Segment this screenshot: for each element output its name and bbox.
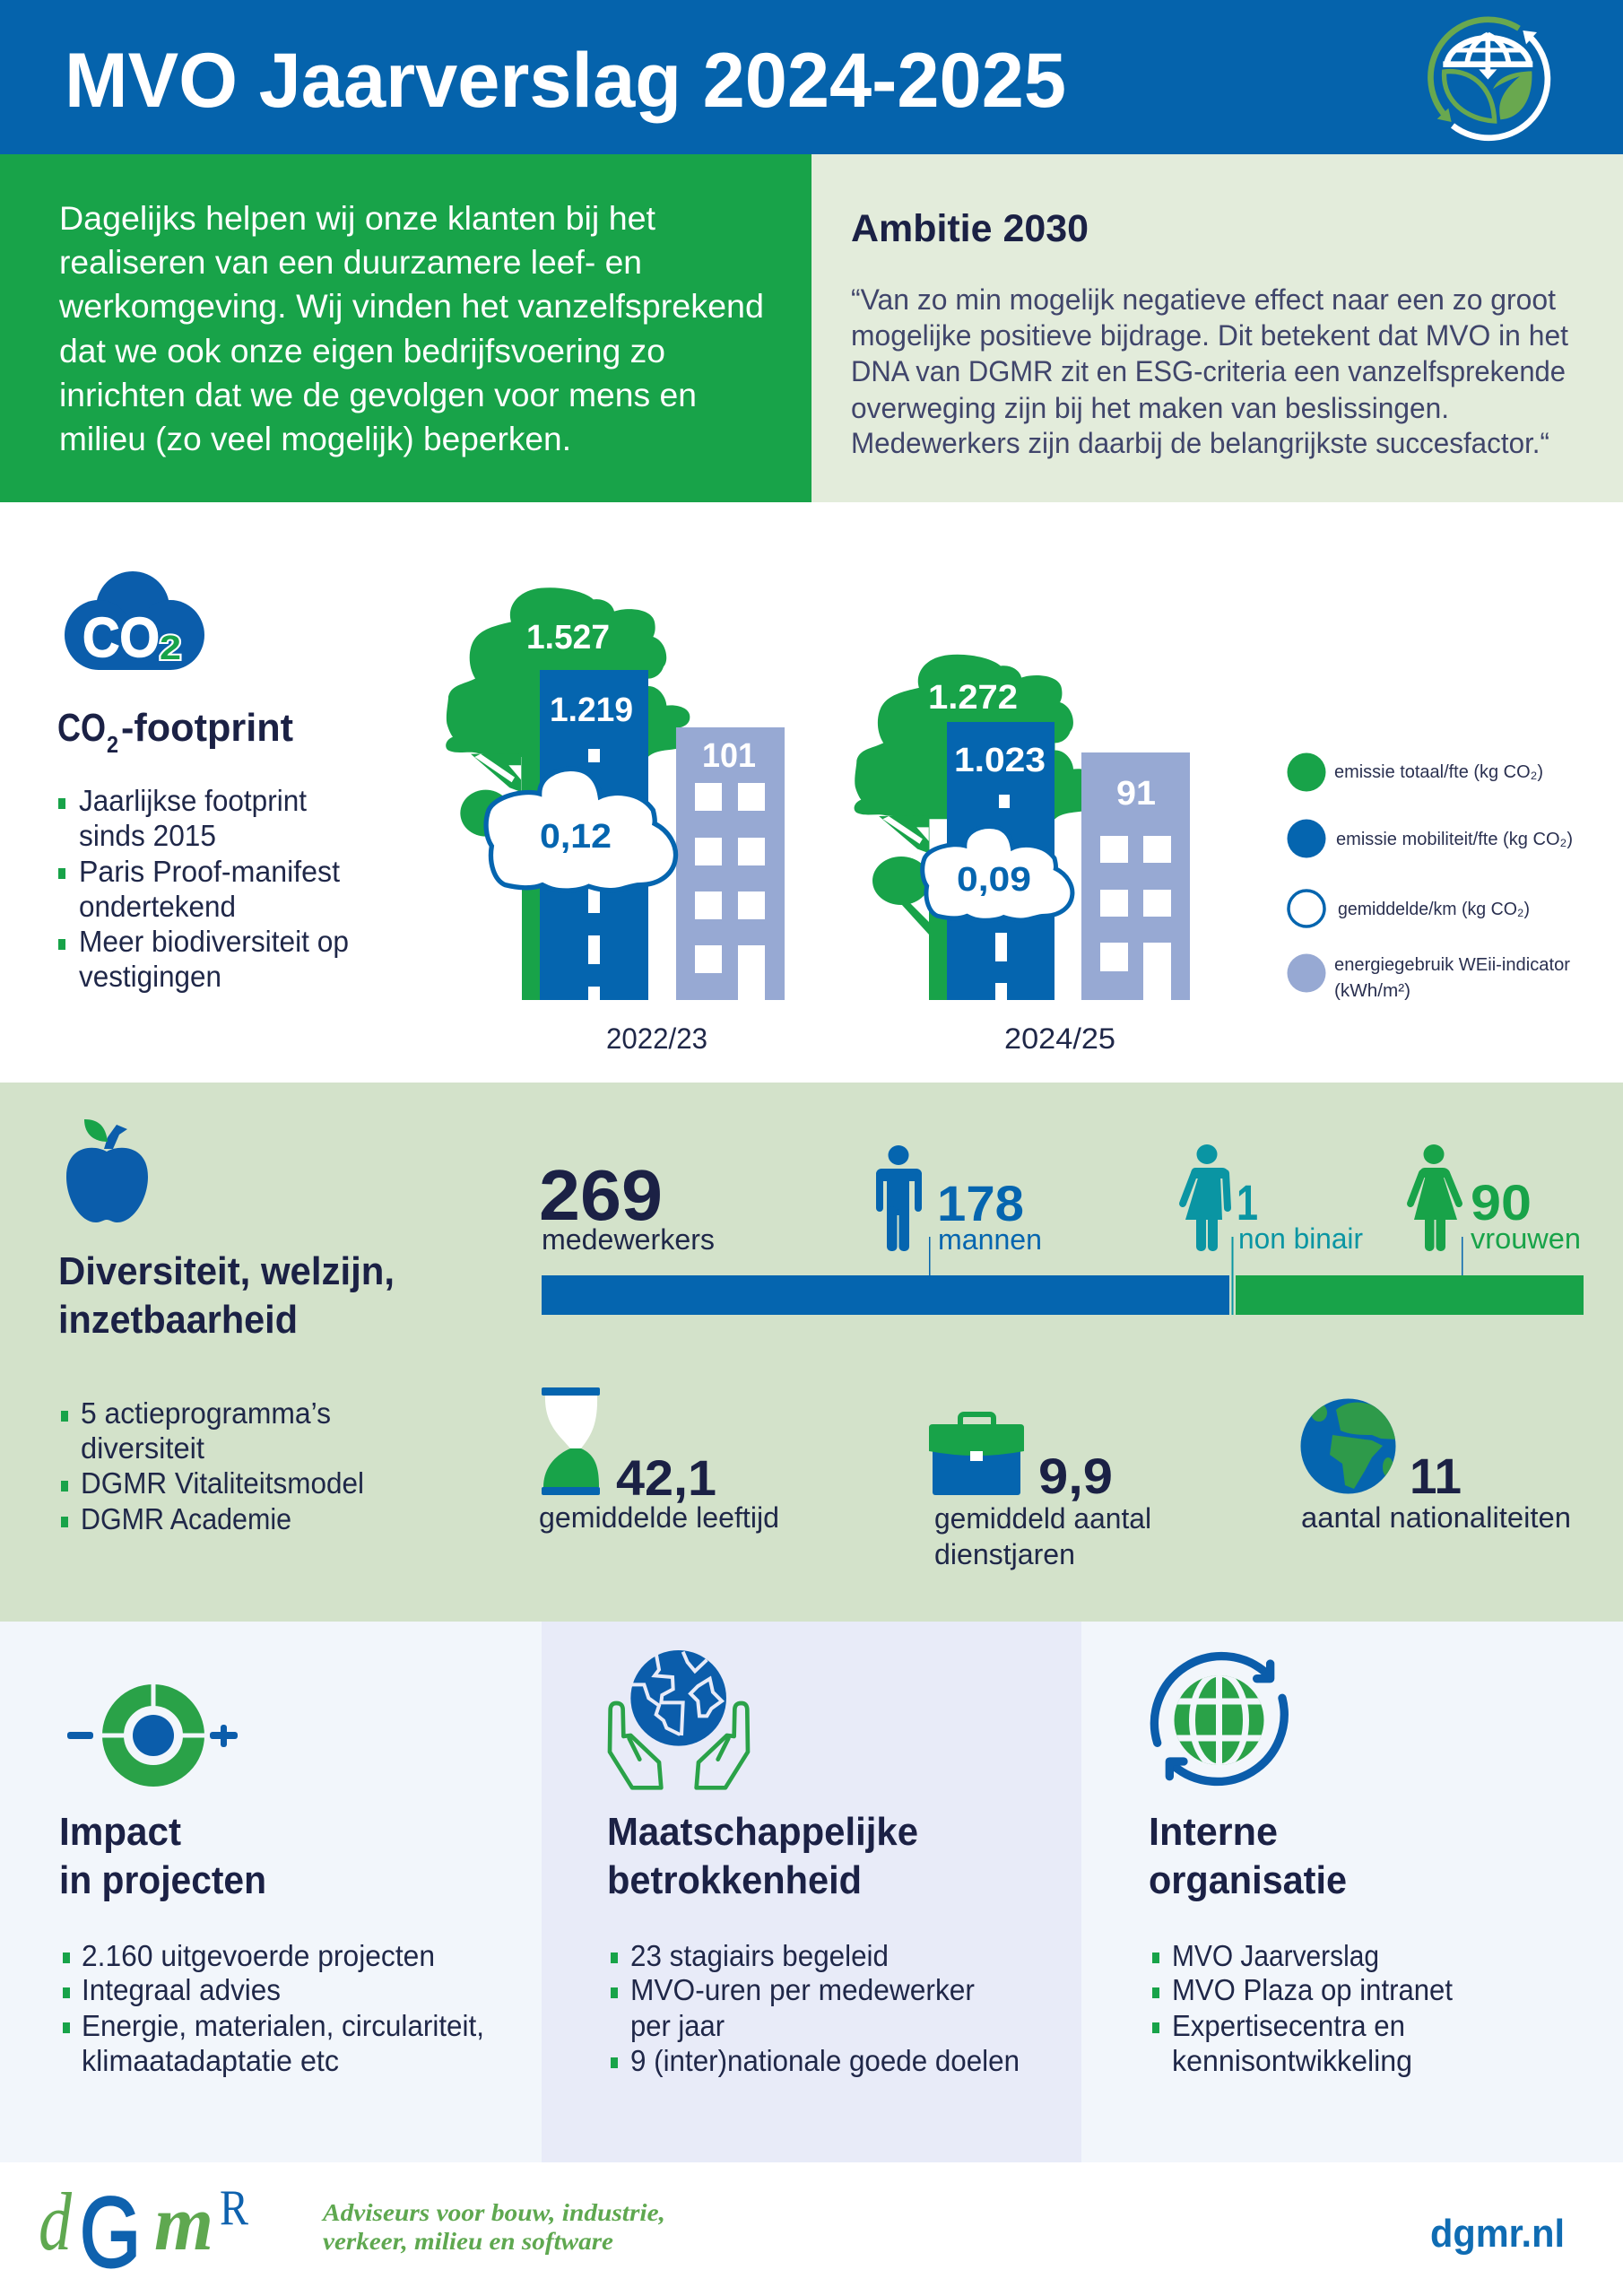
quote text: DNA van DGMR zit en ESG-criteria een vanzelfsprekende [851,355,1566,387]
stat: 90 vrouwen: vrouwen [1471,1222,1581,1255]
building: energiegebruik 101: 101 [702,737,756,775]
heading: interne organisatie: Interne [1149,1810,1278,1854]
panel: diversiteit [0,1083,1623,1622]
icon: impact target [67,1683,238,1776]
axis label: 2024/25: 2024/25 [1004,1022,1115,1055]
stat: 9,9 dienstjaren: 9,9 [1038,1448,1113,1504]
bullet list: diversiteit: DGMR Academie [81,1502,291,1535]
icon: CO2 cloud: 2 [160,630,181,667]
panel: CO2-footprint [57,571,1573,1055]
bullet list: diversiteit: diversiteit [81,1431,204,1465]
bullet list: maatschappelijke: 23 stagiairs begeleid [630,1939,889,1972]
bullet list: CO2 [58,784,349,993]
panel: introduction: milieu (zo veel mogelijk) beperken. [59,421,571,457]
tree: emissie totaal 1.272: 1.272 [928,679,1018,717]
legend: emissie totaal/fte (kg CO₂) [1334,762,1543,782]
heading: maatschappelijke [607,1810,918,1902]
bullet list: CO2: Meer biodiversiteit op [79,925,349,958]
panel: Ambitie 2030 [812,154,1623,502]
icon: briefcase [929,1414,1024,1495]
icon: non-binary person [1183,1144,1228,1251]
cloud: gemiddelde per km 0,09: 0,09 [957,861,1031,899]
legend: gemiddelde/km (kg CO₂) [1338,900,1530,919]
legend: emissie mobiliteit/fte (kg CO₂) [1336,830,1573,849]
heading: CO2-footprint [57,706,293,758]
icon: earth [1300,1399,1399,1494]
bullet list: interne organisatie: MVO Jaarverslag [1172,1939,1379,1972]
heading: CO2-footprint: CO [57,706,106,750]
panel: introduction: werkomgeving. Wij vinden het vanzelfsprekend [58,288,764,325]
heading: impact: in projecten [59,1858,266,1902]
stat: 90 vrouwen: 90 [1471,1174,1532,1231]
panel: introduction: inrichten dat we de gevolgen voor mens en [59,377,697,413]
bullet list: impact: Integraal advies [82,1973,281,2006]
heading: diversiteit: inzetbaarheid [58,1298,298,1342]
stacked gender bar [542,1237,1584,1315]
panel: introduction: dat we ook onze eigen bedrijfsvoering zo [59,333,665,370]
logo: dGmR [39,2176,249,2288]
stat: 9,9 dienstjaren [934,1448,1151,1570]
stat: 9,9 dienstjaren: gemiddeld aantal [934,1502,1151,1535]
building: energiegebruik 91 [1081,752,1190,1000]
bullet list: maatschappelijke [611,1939,1020,2077]
logo: dGmR: d [39,2176,73,2267]
logo: dGmR: G [80,2178,141,2288]
heading: impact [59,1810,266,1902]
bullet list: maatschappelijke: 9 (inter)nationale goede doelen [630,2044,1020,2077]
stat: 11 nationaliteiten: aantal nationaliteiten [1301,1501,1571,1534]
road: emissie mobiliteit 1.219: 1.219 [550,691,633,729]
stat: 11 nationaliteiten: 11 [1410,1448,1462,1504]
chart: 2024/25 [855,655,1190,1055]
logo: dGmR: R [220,2180,249,2236]
tree: emissie totaal 1.527 [446,587,690,1000]
building: energiegebruik 91: 91 [1116,775,1156,813]
panel: introduction: realiseren van een duurzamere leef- en [59,244,642,281]
heading: diversiteit [58,1249,395,1342]
stat: 269 medewerkers [539,1155,715,1256]
title: MVO Jaarverslag 2024-2025 [65,38,1066,124]
bullet list: CO2: ondertekend [79,890,236,923]
bullet list: impact [63,1939,484,2077]
quote text [851,283,1568,459]
road: emissie mobiliteit 1.023: 1.023 [954,742,1046,779]
stat: 42,1 gemiddelde leeftijd: gemiddelde leeftijd [539,1501,779,1534]
icon: woman [1410,1144,1459,1251]
panel: introduction [0,154,812,502]
tree: emissie totaal 1.527: 1.527 [526,619,610,657]
road: emissie mobiliteit 1.219 [540,670,648,1000]
stat: 1 non binair [1237,1174,1363,1255]
stat: 1 non binair: non binair [1238,1222,1363,1255]
bullet list: CO2: vestigingen [79,960,221,993]
heading: Ambitie 2030: Ambitie 2030 [851,207,1089,250]
axis label: 2022/23: 2022/23 [606,1022,707,1055]
quote text: mogelijke positieve bijdrage. Dit betekent dat MVO in het [851,319,1568,352]
header banner [0,0,1623,154]
building: energiegebruik 101 [676,727,785,1000]
icon: CO2 cloud: CO [82,607,160,669]
icon: globe with leaves logo [1430,20,1548,138]
legend [1288,753,1573,1001]
stat: 269 medewerkers: 269 [539,1155,663,1235]
stat: 178 mannen [937,1175,1042,1256]
heading: CO2-footprint: -footprint [121,706,293,750]
panel: impact in projecten [0,1622,542,2162]
stat: 90 vrouwen [1471,1174,1581,1255]
icon: apple [66,1119,148,1222]
legend: energiegebruik WEii-indicator [1334,955,1570,975]
stat: 42,1 gemiddelde leeftijd: 42,1 [616,1449,716,1506]
heading: CO2-footprint: 2 [107,731,118,758]
bullet list: impact: Energie, materialen, circulariteit, [82,2009,484,2042]
cloud: gemiddelde per km 0,09 [923,827,1072,920]
tagline [321,2199,665,2255]
tagline: verkeer, milieu en software [323,2228,613,2255]
heading: interne organisatie [1149,1810,1347,1902]
bullet list: diversiteit: 5 actieprogramma’s [81,1396,331,1430]
stat: 1 non binair: 1 [1237,1174,1258,1231]
quote text: overweging zijn bij het maken van beslissingen. [851,392,1449,424]
icon: globe in hands [610,1650,748,1787]
road: emissie mobiliteit 1.023 [947,722,1055,1000]
panel: maatschappelijke betrokkenheid [542,1622,1081,2162]
chart: 2022/23 [446,587,785,1055]
website: dgmr.nl [1430,2212,1565,2256]
cloud: gemiddelde per km 0,12: 0,12 [540,818,612,856]
legend: (kWh/m²) [1334,981,1410,1001]
heading: impact: Impact [59,1810,181,1854]
panel: interne organisatie [1081,1622,1623,2162]
heading: diversiteit: Diversiteit, welzijn, [58,1249,395,1293]
stat: 42,1 gemiddelde leeftijd [539,1449,779,1534]
bullet list: interne organisatie [1152,1939,1453,2077]
quote text: “Van zo min mogelijk negatieve effect naar een zo groot [851,283,1556,316]
icon: man [876,1145,922,1251]
bullet list: CO2: Paris Proof-manifest [79,855,340,888]
bullet list: impact: 2.160 uitgevoerde projecten [82,1939,435,1972]
bullet list: CO2: Jaarlijkse footprint [79,784,307,817]
bullet list: maatschappelijke: MVO-uren per medewerker [630,1973,975,2006]
heading: maatschappelijke: Maatschappelijke [607,1810,918,1854]
icon: hourglass [542,1387,600,1495]
bullet list: diversiteit [61,1396,364,1535]
stat: 178 mannen: 178 [937,1175,1024,1231]
bullet list: maatschappelijke: per jaar [630,2009,725,2042]
logo: dGmR: m [154,2180,213,2267]
stat: 9,9 dienstjaren: dienstjaren [934,1538,1075,1570]
bullet list: interne organisatie: MVO Plaza op intranet [1172,1973,1453,2006]
footer [39,2176,1565,2288]
stat: 178 mannen: mannen [938,1223,1042,1256]
bullet list: interne organisatie: Expertisecentra en [1172,2009,1405,2042]
bullet list: interne organisatie: kennisontwikkeling [1172,2044,1412,2077]
bullet list: impact: klimaatadaptatie etc [82,2044,339,2077]
bullet list: diversiteit: DGMR Vitaliteitsmodel [81,1466,364,1500]
stat: 269 medewerkers: medewerkers [542,1223,715,1256]
tagline: Adviseurs voor bouw, industrie, [321,2199,665,2226]
heading: maatschappelijke: betrokkenheid [607,1858,862,1902]
panel: introduction: Dagelijks helpen wij onze klanten bij het [59,200,656,237]
stat: 11 nationaliteiten [1301,1448,1571,1534]
cloud: gemiddelde per km 0,12 [486,769,676,891]
icon: globe with cycle arrows [1154,1657,1284,1781]
icon: CO2 cloud [65,571,204,670]
heading: interne organisatie: organisatie [1149,1858,1347,1902]
quote text: Medewerkers zijn daarbij de belangrijkste succesfactor.“ [851,427,1549,459]
tree: emissie totaal 1.272 [855,655,1097,1000]
bullet list: CO2: sinds 2015 [79,819,216,852]
